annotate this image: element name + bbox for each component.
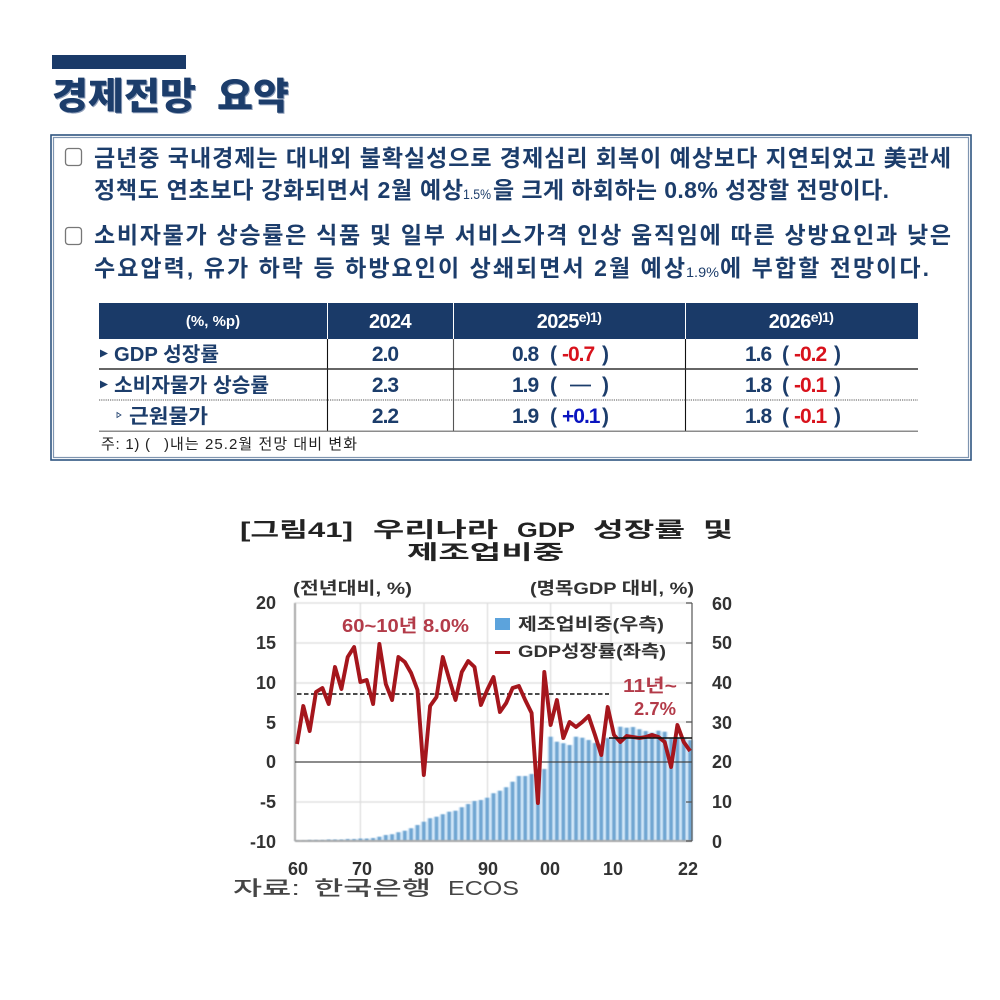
- title: [52, 76, 289, 117]
- table row: core prices: [117, 405, 840, 428]
- right axis labels: 20: [712, 752, 732, 772]
- left axis labels: 15: [256, 633, 276, 653]
- bullet paragraph: inflation outlook: [66, 222, 951, 281]
- right axis labels: 10: [712, 792, 732, 812]
- bullet paragraph: GDP outlook: [66, 145, 951, 203]
- bullet paragraph: GDP outlook: 금년중 국내경제는 대내외 불확실성으로 경제심리 회복이 예상보다 지연되었고 美관세: [94, 145, 951, 171]
- legend: [495, 615, 666, 661]
- bullet paragraph: GDP outlook: 1.5%: [463, 186, 491, 202]
- x axis labels: 10: [603, 859, 623, 879]
- table row: core prices: 근원물가: [129, 405, 208, 428]
- bullet paragraph: inflation outlook: 1.9%: [686, 264, 719, 280]
- panel: summary box: [51, 135, 971, 460]
- chart title: 제조업비중: [407, 541, 564, 564]
- right axis unit: (명목GDP 대비, %): [530, 579, 694, 598]
- table row: GDP growth: -0.7: [562, 343, 595, 366]
- bullet paragraph: inflation outlook: 수요압력, 유가 하락 등 하방요인이 상쇄되면서 2월 예상: [94, 255, 685, 281]
- x axis labels: 22: [678, 859, 698, 879]
- left axis labels: -5: [260, 792, 276, 812]
- table row: consumer prices: ): [602, 374, 608, 397]
- chart title: [그림41]: [240, 519, 353, 542]
- table row: GDP growth: 1.6: [745, 343, 772, 366]
- source note: 자료:: [233, 877, 300, 900]
- source note: ECOS: [448, 878, 519, 900]
- table row: GDP growth: (: [782, 343, 789, 366]
- average line 2011-2022: [609, 737, 692, 739]
- table header row: e)1): [811, 309, 833, 325]
- x axis labels: 80: [414, 859, 434, 879]
- table row: core prices: 1.8: [745, 405, 773, 428]
- chart figure: [233, 519, 733, 900]
- left axis labels: 10: [256, 673, 276, 693]
- table footnote: 주: 1) (: [101, 436, 150, 453]
- x axis labels: [288, 859, 698, 879]
- title: 요약: [217, 76, 289, 117]
- table row: consumer prices: 소비자물가 상승률: [114, 374, 269, 397]
- left axis labels: -10: [250, 832, 276, 852]
- table row: core prices: +0.1: [562, 405, 601, 428]
- table row: GDP growth: 2.0: [372, 343, 398, 366]
- chart title: GDP: [517, 519, 575, 542]
- right axis labels: 30: [712, 713, 732, 733]
- bullet paragraph: inflation outlook: 에 부합할 전망이다.: [720, 255, 929, 281]
- chart title: 성장률: [593, 519, 685, 542]
- x axis labels: 00: [540, 859, 560, 879]
- table row: GDP growth: GDP 성장률: [114, 343, 219, 366]
- table row: core prices: (: [782, 405, 789, 428]
- table row: GDP growth: ): [834, 343, 840, 366]
- source note: [233, 877, 519, 900]
- right axis labels: 50: [712, 633, 732, 653]
- annotation: 2011-2022 average: 2.7%: [634, 699, 676, 719]
- annotation: 2011-2022 average: 11년~: [623, 676, 677, 696]
- title: 경제전망: [52, 76, 196, 117]
- left axis labels: [250, 593, 276, 852]
- legend: 제조업비중(우측): [518, 615, 664, 634]
- table row: consumer prices: ): [834, 374, 840, 397]
- table row: consumer prices: (: [550, 374, 557, 397]
- table row: consumer prices: [100, 374, 840, 397]
- x axis labels: 70: [352, 859, 372, 879]
- table header row: e)1): [579, 309, 601, 325]
- table header row: 2026: [769, 311, 811, 333]
- table row: consumer prices: 1.8: [745, 374, 773, 397]
- table row: GDP growth: (: [550, 343, 557, 366]
- title accent bar: [52, 55, 186, 69]
- left axis labels: 20: [256, 593, 276, 613]
- right axis labels: [712, 594, 732, 852]
- table row: GDP growth: -0.2: [794, 343, 827, 366]
- annotation: 2011-2022 average: [623, 676, 677, 719]
- bullet paragraph: GDP outlook: 을 크게 하회하는 0.8% 성장할 전망이다.: [493, 177, 889, 203]
- table row: core prices: ): [834, 405, 840, 428]
- bullet paragraph: GDP outlook: 정책도 연초보다 강화되면서 2월 예상: [94, 177, 463, 203]
- annotation: 1960-2010 average: 60~10년 8.0%: [342, 616, 469, 636]
- right axis labels: 0: [712, 832, 722, 852]
- table header row: (%, %p): [186, 313, 240, 330]
- right axis labels: 40: [712, 673, 732, 693]
- right axis labels: 60: [712, 594, 732, 614]
- table row: core prices: ): [602, 405, 608, 428]
- table row: consumer prices: -0.1: [794, 374, 828, 397]
- table row: consumer prices: 2.3: [372, 374, 398, 397]
- table header row: 2025: [537, 311, 579, 333]
- GDP growth line: [297, 644, 690, 803]
- chart title: [240, 519, 733, 564]
- forecast table: [99, 303, 918, 431]
- plot area: [295, 603, 692, 841]
- table row: GDP growth: [100, 343, 840, 366]
- table row: GDP growth: 0.8: [512, 343, 540, 366]
- table row: core prices: -0.1: [794, 405, 828, 428]
- table row: core prices: 2.2: [372, 405, 398, 428]
- table footnote: )내는 25.2월 전망 대비 변화: [164, 436, 357, 453]
- chart title: 우리나라: [373, 519, 498, 542]
- chart title: 및: [703, 519, 733, 542]
- table row: GDP growth: ): [602, 343, 608, 366]
- source note: 한국은행: [314, 877, 431, 900]
- table row: core prices: (: [550, 405, 557, 428]
- left axis labels: 5: [266, 713, 276, 733]
- table row: consumer prices: 1.9: [512, 374, 539, 397]
- left axis labels: 0: [266, 752, 276, 772]
- bullet paragraph: inflation outlook: 소비자물가 상승률은 식품 및 일부 서비스가격 인상 움직임에 따른 상방요인과 낮은: [94, 222, 951, 248]
- x axis labels: 90: [478, 859, 498, 879]
- bars: manufacturing share: [297, 727, 690, 841]
- table header row: 2024: [369, 311, 413, 333]
- legend: GDP성장률(좌측): [518, 642, 666, 661]
- x axis labels: 60: [288, 859, 308, 879]
- table row: core prices: 1.9: [512, 405, 539, 428]
- table row: consumer prices: (: [782, 374, 789, 397]
- dashed average 1960-2010: [297, 693, 609, 695]
- table header row: [99, 303, 918, 339]
- left axis unit: (전년대비, %): [293, 579, 412, 598]
